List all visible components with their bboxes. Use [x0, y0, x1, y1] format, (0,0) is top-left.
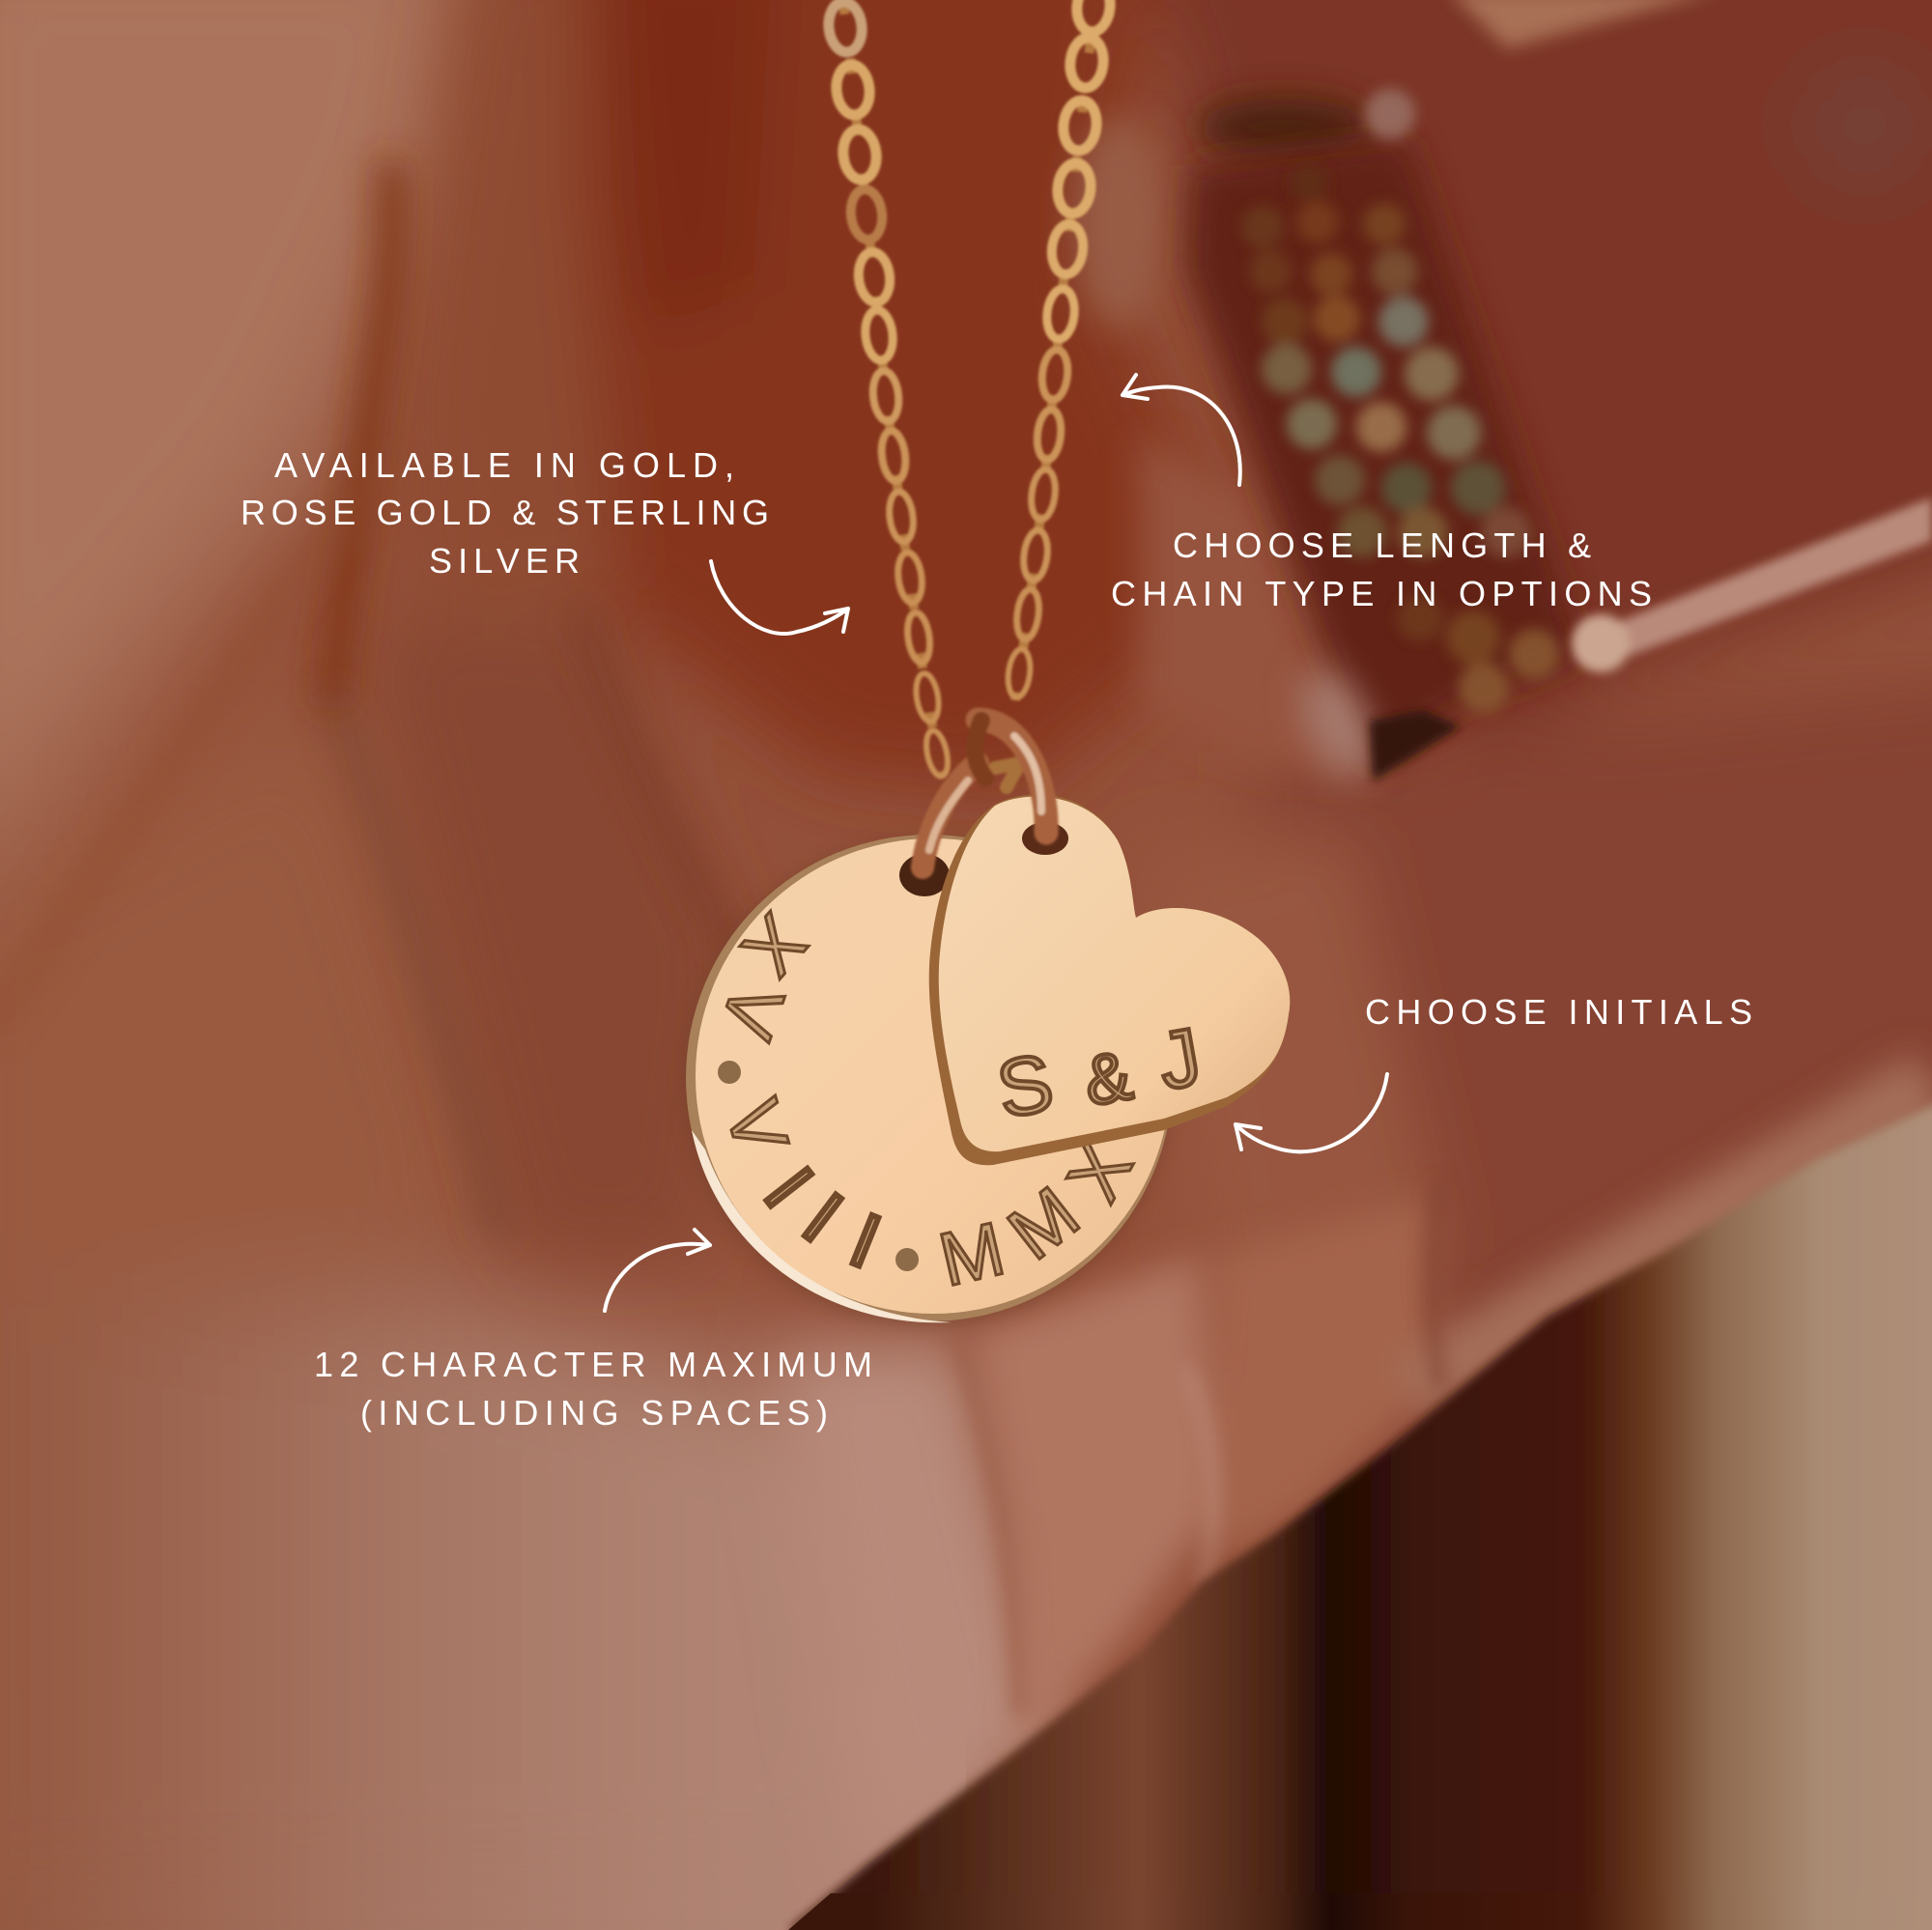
blurred second chain background [1072, 0, 1719, 789]
stamped text: XV.VIII.MMX: V [710, 1091, 805, 1162]
arrow: to chain from length option [1122, 375, 1240, 485]
arrow: to disc text [605, 1230, 710, 1311]
callout: length and chain: CHOOSE LENGTH & [1173, 525, 1591, 565]
callout: initials: CHOOSE INITIALS [1365, 992, 1752, 1032]
initials: & [1078, 1036, 1138, 1121]
callout: length and chain: CHAIN TYPE IN OPTIONS [1111, 574, 1652, 613]
initials: J [1151, 1010, 1208, 1107]
blurred light chain highlight [1572, 497, 1932, 672]
stamped text: XV.VIII.MMX [704, 898, 1149, 1302]
initials: S [990, 1036, 1060, 1135]
callout: character limit: 12 CHARACTER MAXIMUM [314, 1345, 872, 1384]
chain: left strand [826, 0, 952, 779]
stamped text: XV.VIII.MMX: X [1050, 1129, 1149, 1214]
heart hole [1022, 822, 1068, 855]
arrow: to chain from metal options [711, 561, 848, 634]
stamped text: XV.VIII.MMX: M [931, 1206, 1012, 1302]
callout: metal options [241, 445, 769, 581]
stamped text: XV.VIII.MMX: I [839, 1197, 892, 1284]
hole in disc [899, 854, 950, 896]
callout: character limit: (INCLUDING SPACES) [360, 1393, 828, 1433]
stamped text: XV.VIII.MMX: I [750, 1152, 829, 1222]
round disc pendant with stamped date [684, 835, 1173, 1325]
stamped text: XV.VIII.MMX: M [992, 1170, 1094, 1276]
blurred beads of the second chain [1241, 163, 1559, 713]
callout: metal options: SILVER [429, 541, 580, 581]
dark area behind the hand [788, 1101, 1932, 1930]
creases in the palm [0, 174, 1439, 1710]
arrow: to heart initials [1236, 1074, 1387, 1151]
out-of-focus top bead [1365, 89, 1415, 139]
callout: character limit [314, 1345, 872, 1433]
stamped text: XV.VIII.MMX: X [726, 898, 823, 993]
callout: metal options: AVAILABLE IN GOLD, [274, 445, 734, 485]
stamped text: XV.VIII.MMX: I [789, 1177, 857, 1258]
fingers near the bottom [976, 1082, 1932, 1739]
stamped text: XV.VIII.MMX: V [704, 974, 801, 1049]
callout: length and chain [1111, 525, 1652, 613]
chain: right strand [1006, 0, 1113, 700]
jump rings [923, 720, 1046, 867]
initials [990, 1010, 1208, 1135]
callout: metal options: ROSE GOLD & STERLING [241, 493, 769, 532]
heart pendant with initials [929, 795, 1290, 1165]
